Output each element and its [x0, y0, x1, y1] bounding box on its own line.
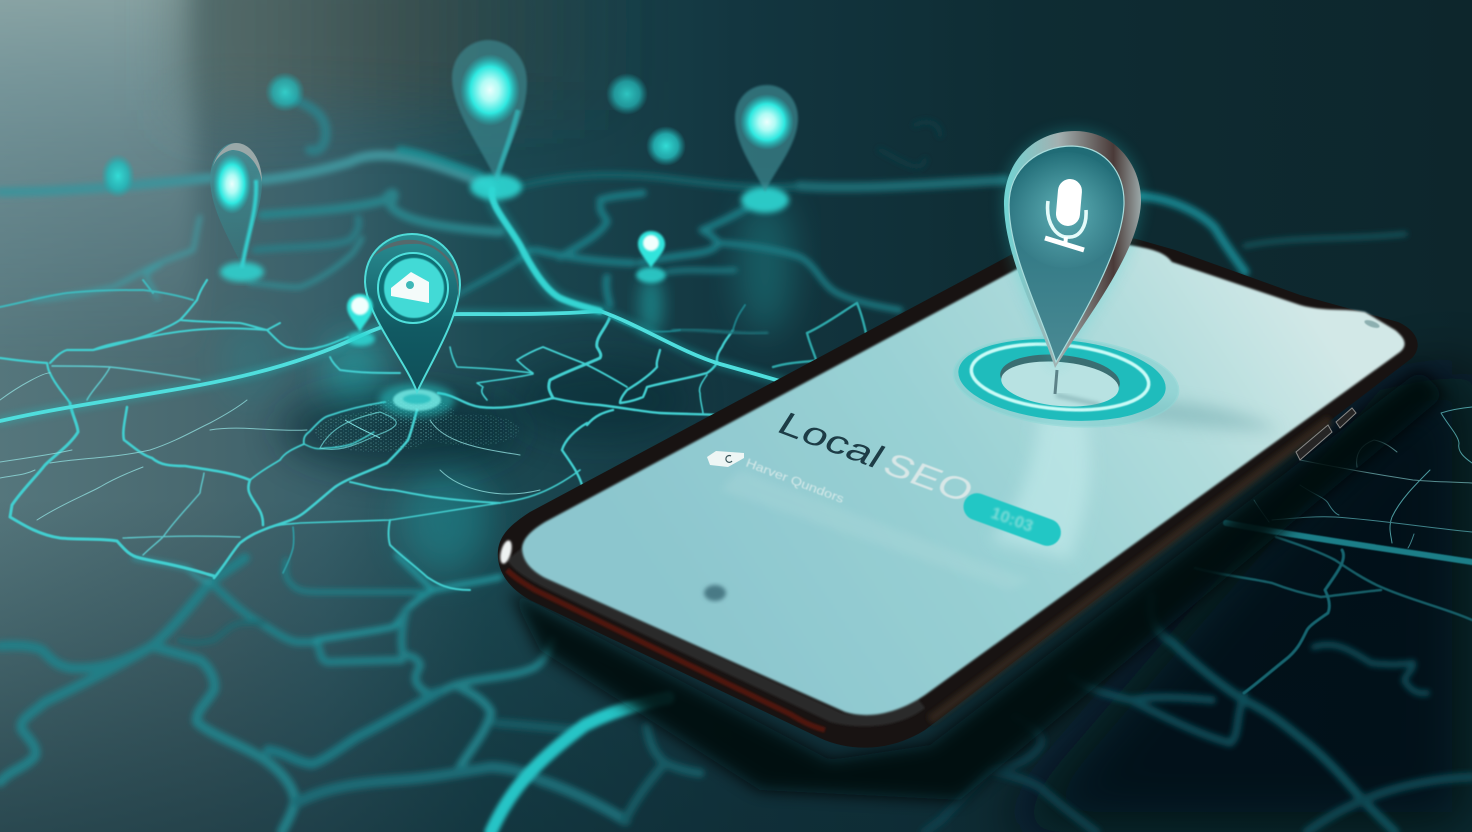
- pin: home: [365, 234, 460, 417]
- ring on phone: [950, 328, 1182, 436]
- map roads: lower foreground wide roads: [0, 555, 1472, 832]
- pin: top right: [735, 85, 798, 213]
- screen home dot: [704, 585, 726, 601]
- icon: microphone: [1045, 178, 1086, 250]
- map roads: bright main route: [0, 190, 1472, 832]
- screen light beam: [990, 415, 1090, 560]
- phone side buttons: [1296, 408, 1356, 460]
- screen app icon: [707, 451, 744, 467]
- phone red edge: [507, 570, 825, 730]
- pin: left small: [210, 143, 264, 282]
- phone right edge sheen: [930, 420, 1330, 720]
- icon: house: [391, 272, 429, 303]
- camera hint: [1363, 318, 1381, 330]
- small glowing pin: centre: [636, 231, 666, 283]
- phone body: [498, 235, 1418, 748]
- glowing location dots: [101, 72, 686, 198]
- phone lower grey bezel: [507, 548, 925, 726]
- phone: [498, 235, 1418, 748]
- stippled city texture: [315, 398, 520, 452]
- map roads: thin detail lines: [0, 373, 1472, 548]
- screen pill badge: [960, 489, 1065, 550]
- pin: microphone: [1004, 131, 1141, 368]
- small glowing pin: left: [347, 294, 375, 346]
- map roads: cyan mid network: [0, 280, 867, 590]
- ring shadow on screen: [1120, 400, 1280, 430]
- screen heading: Local SEO: Local: [771, 406, 891, 475]
- screen pill badge: 10:03: [988, 503, 1036, 536]
- phone corner highlight: [498, 539, 514, 565]
- phone shadow: [510, 370, 1445, 800]
- screen heading: Local SEO: [770, 406, 981, 510]
- screen heading: Local SEO: SEO: [876, 447, 980, 510]
- screen caption: Harver Qundors: [744, 458, 846, 506]
- screen band: [720, 470, 1030, 590]
- phone screen: [522, 244, 1405, 715]
- pin: top centre: [452, 40, 527, 200]
- map roads: far blurred network: [0, 96, 1405, 310]
